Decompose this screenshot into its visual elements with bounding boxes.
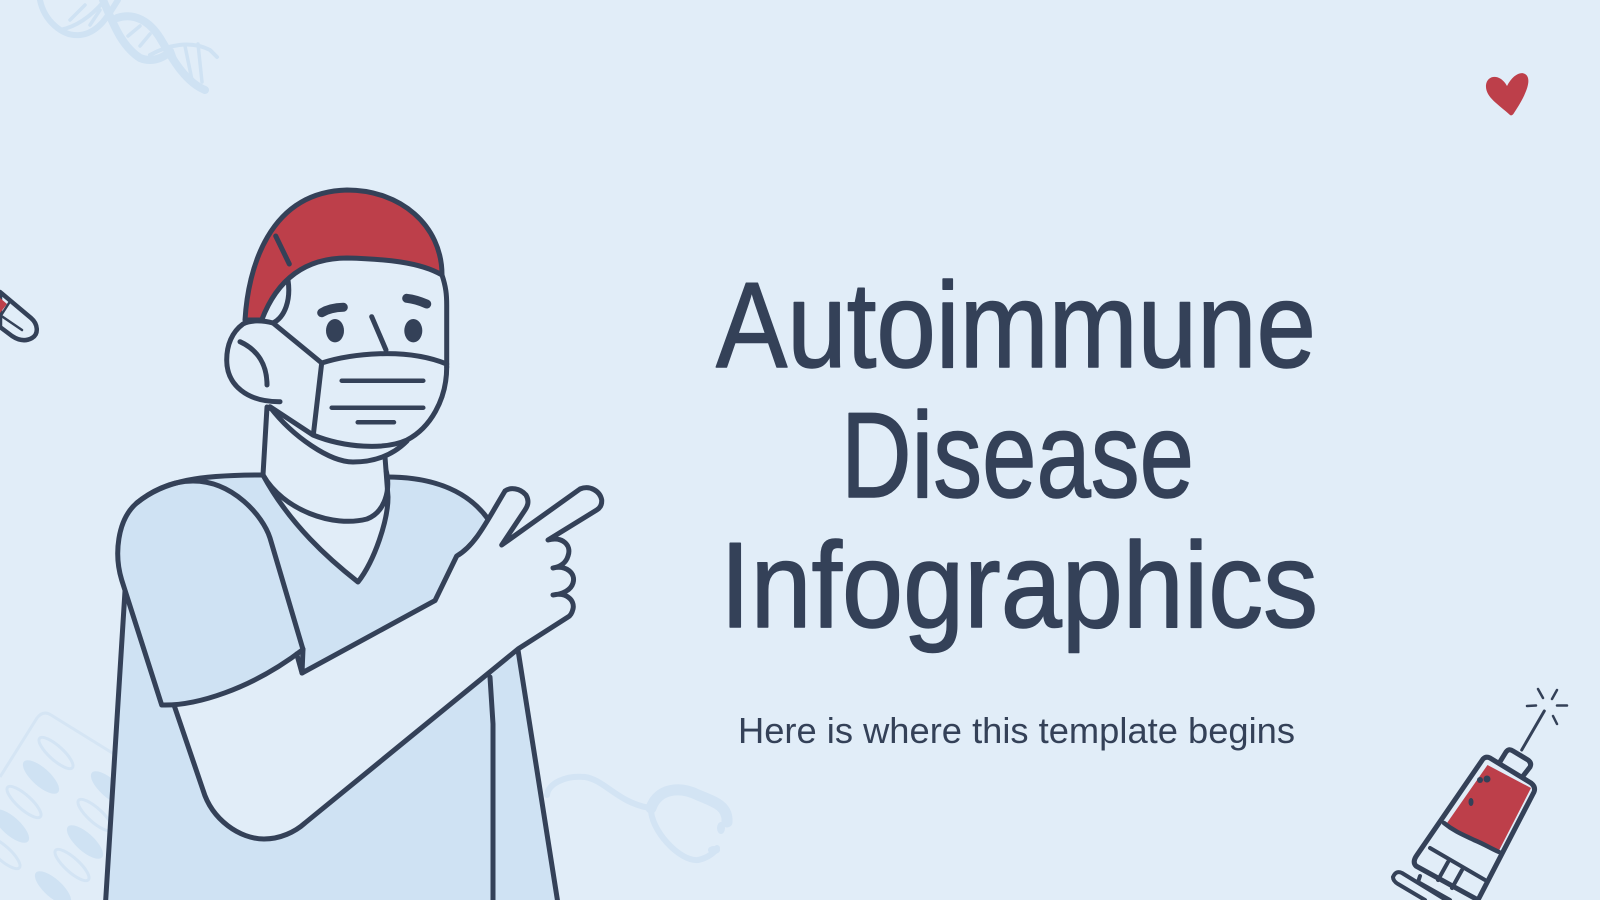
ear fill [227,321,300,402]
chin strap [270,407,407,462]
syringe nozzle [1498,750,1531,780]
icon: pill capsule [0,292,37,340]
face [245,190,447,462]
face outline [442,275,447,367]
eyes [326,319,422,342]
surgical mask [270,323,447,446]
red cap [245,190,442,320]
sleeve cuff [297,654,302,673]
short sleeve [118,481,303,705]
ear outline [227,321,280,402]
character: doctor pointing [106,190,602,900]
nose [372,317,386,350]
title line 3: Infographics [720,517,1318,653]
syringe red liquid [1447,765,1531,852]
title [716,257,1318,653]
body outlines [106,477,557,900]
watermark: stethoscope [547,777,727,860]
syringe barrel [1414,757,1535,900]
mask pleats [332,381,423,422]
syringe liquid edge and bubbles [1444,776,1499,852]
inner ear [240,342,267,385]
syringe plunger [1393,848,1485,900]
neckline arc [263,470,388,521]
watermark: pill blister pack [0,713,132,900]
watermark: DNA helix [40,0,217,90]
icon: heart [1486,73,1528,115]
cap fold line [273,236,289,323]
eyebrows [322,298,427,313]
head [227,190,447,462]
icon: syringe [1393,689,1567,900]
pointing arm and hand [174,488,602,839]
syringe needle and sparks [1522,689,1567,750]
subtitle: Here is where this template begins [738,710,1295,751]
neck and collar [263,407,388,582]
scrub top body [106,475,557,900]
title line 2: Disease [841,387,1194,523]
shoulder top outline [137,475,263,503]
title line 1: Autoimmune [716,257,1316,393]
